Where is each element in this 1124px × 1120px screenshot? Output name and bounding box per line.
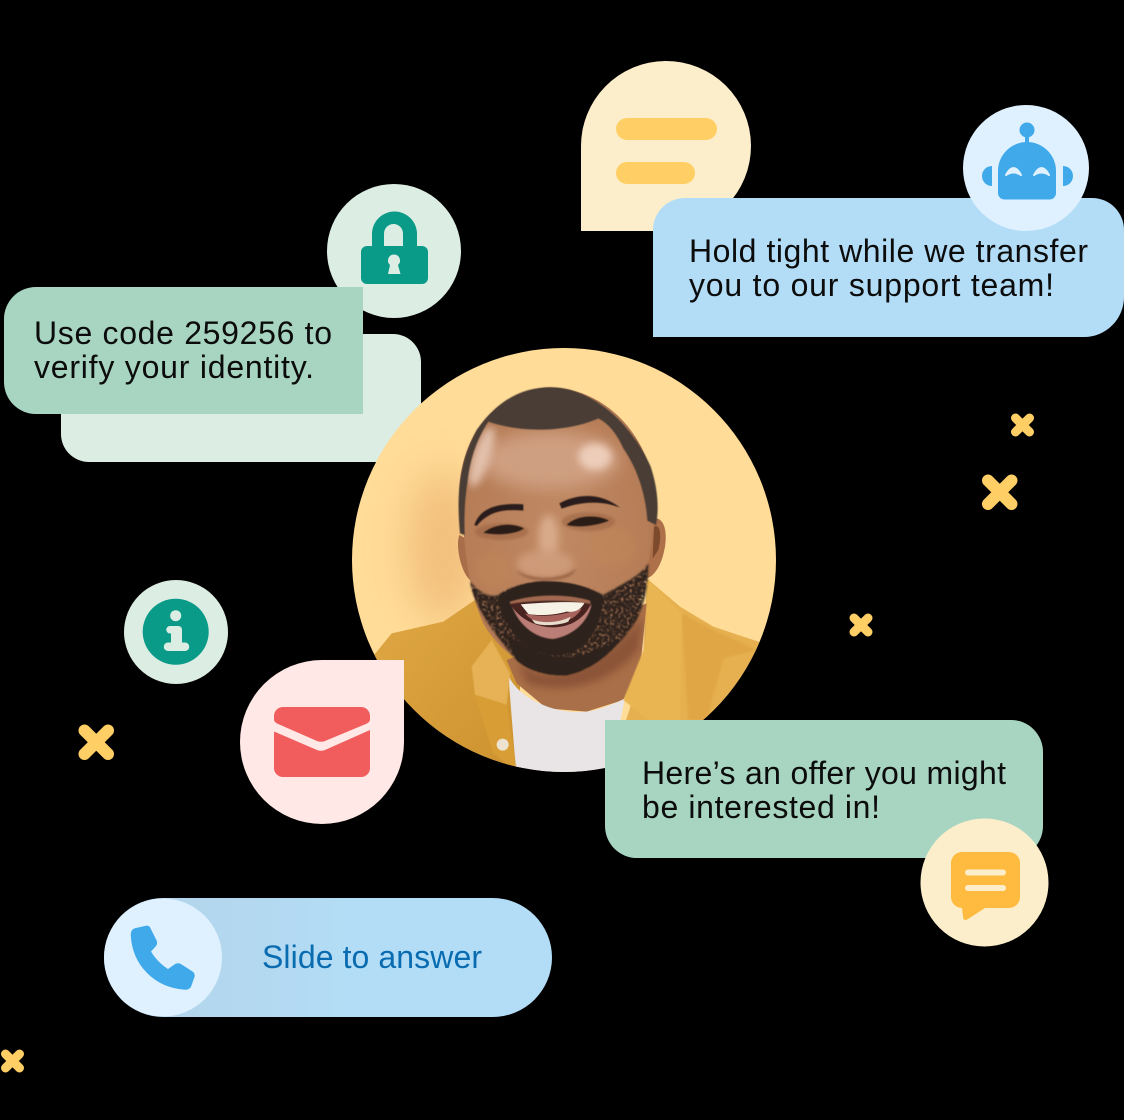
icon: chat message (920, 818, 1048, 946)
decoration: yellow crosses (6, 418, 1030, 1068)
panel: support transfer message (653, 198, 1124, 337)
mouth opening (510, 601, 591, 627)
panel: identity code message (4, 287, 363, 414)
collars (472, 640, 510, 705)
text: slide label: Slide to answer (262, 939, 482, 975)
top teeth (521, 602, 585, 615)
text: verification message: Use code 259256 to (34, 315, 332, 351)
face (459, 387, 655, 675)
text: offer message: be interested in! (642, 789, 880, 825)
photo: smiling man in circle (347, 343, 787, 780)
button (497, 739, 509, 751)
panel: pale green back bubble (61, 334, 421, 462)
icon: robot (963, 105, 1089, 231)
t-shirt (508, 675, 625, 780)
icon: mail bubble (240, 660, 404, 824)
neck (507, 603, 647, 712)
text: verification message: verify your identity. (34, 349, 314, 385)
text: offer message: Here’s an offer you might (642, 755, 1006, 791)
beard (470, 563, 648, 675)
text: transfer message: Hold tight while we transfer (689, 233, 1088, 269)
nose (538, 515, 558, 562)
eye sockets (475, 523, 528, 540)
eyes (483, 525, 524, 534)
panel: offer message (605, 720, 1043, 858)
gums and tongue (525, 608, 582, 622)
lower lip (512, 604, 592, 639)
shirt (370, 600, 520, 780)
control: slide to answer (104, 898, 552, 1017)
upper lip (510, 596, 591, 604)
ears (458, 535, 470, 580)
brows (474, 504, 523, 526)
text: transfer message: you to our support team! (689, 267, 1054, 303)
panel: yellow chat bubble (581, 61, 751, 231)
icon: padlock (327, 184, 461, 318)
bottom teeth (532, 617, 571, 625)
icon: info (124, 580, 228, 684)
icon: phone (104, 898, 222, 1016)
hair (459, 387, 658, 535)
highlights (480, 432, 620, 488)
